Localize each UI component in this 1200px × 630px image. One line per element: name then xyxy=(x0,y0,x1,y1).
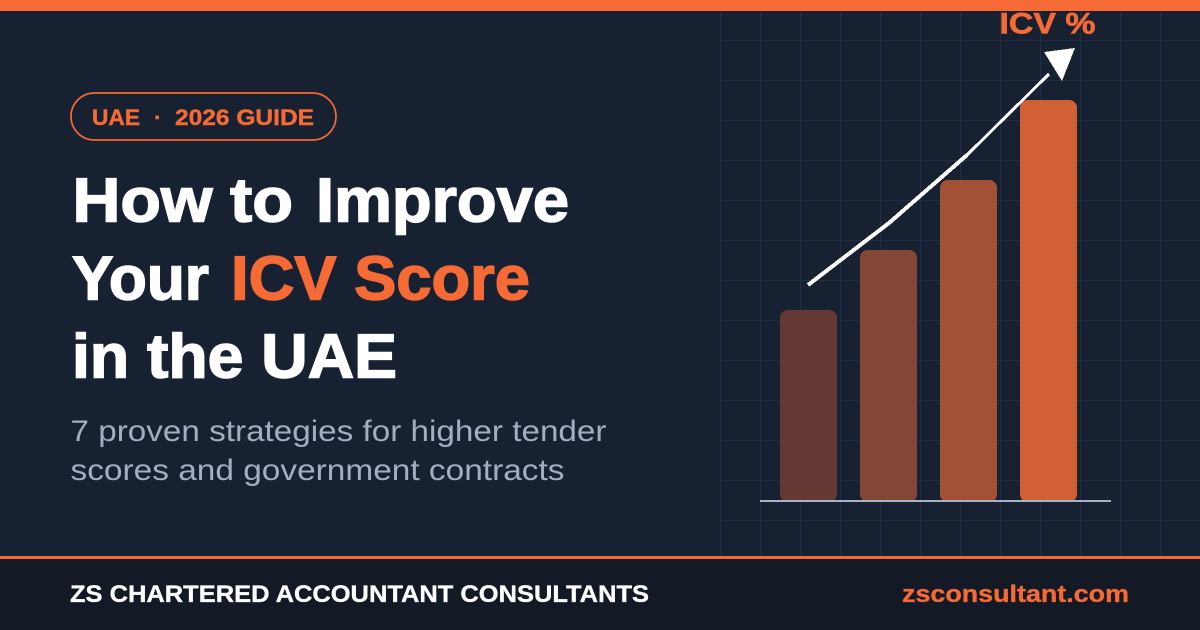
title: to xyxy=(230,166,293,236)
badge: UAE 2026 guide xyxy=(71,93,336,140)
footer band xyxy=(0,556,1200,630)
top accent bar xyxy=(0,0,1200,11)
badge: UAE 2026 guide: 2026 GUIDE xyxy=(175,105,314,130)
title: Improve xyxy=(316,166,569,236)
title: ICV Score xyxy=(231,244,530,314)
bar chart xyxy=(760,100,1111,502)
badge: UAE 2026 guide: · xyxy=(154,105,162,130)
title xyxy=(72,166,569,392)
company name: ZS CHARTERED ACCOUNTANT CONSULTANTS xyxy=(70,581,649,608)
title: in the UAE xyxy=(72,322,397,392)
subtitle: scores and government contracts xyxy=(70,454,564,487)
chart baseline xyxy=(760,500,1111,502)
bar 3 xyxy=(940,180,997,502)
subtitle: 7 proven strategies for higher tender xyxy=(70,415,607,448)
growth arrow xyxy=(808,48,1075,285)
website: zsconsultant.com xyxy=(902,581,1129,608)
bar 4 xyxy=(1020,100,1077,502)
title: Your xyxy=(72,244,209,314)
subtitle xyxy=(70,415,607,487)
label: ICV %: ICV % xyxy=(1000,8,1096,40)
bar 1 xyxy=(780,310,837,502)
bar 2 xyxy=(860,250,917,502)
badge: UAE 2026 guide: UAE xyxy=(92,105,140,130)
title: How xyxy=(72,166,213,236)
